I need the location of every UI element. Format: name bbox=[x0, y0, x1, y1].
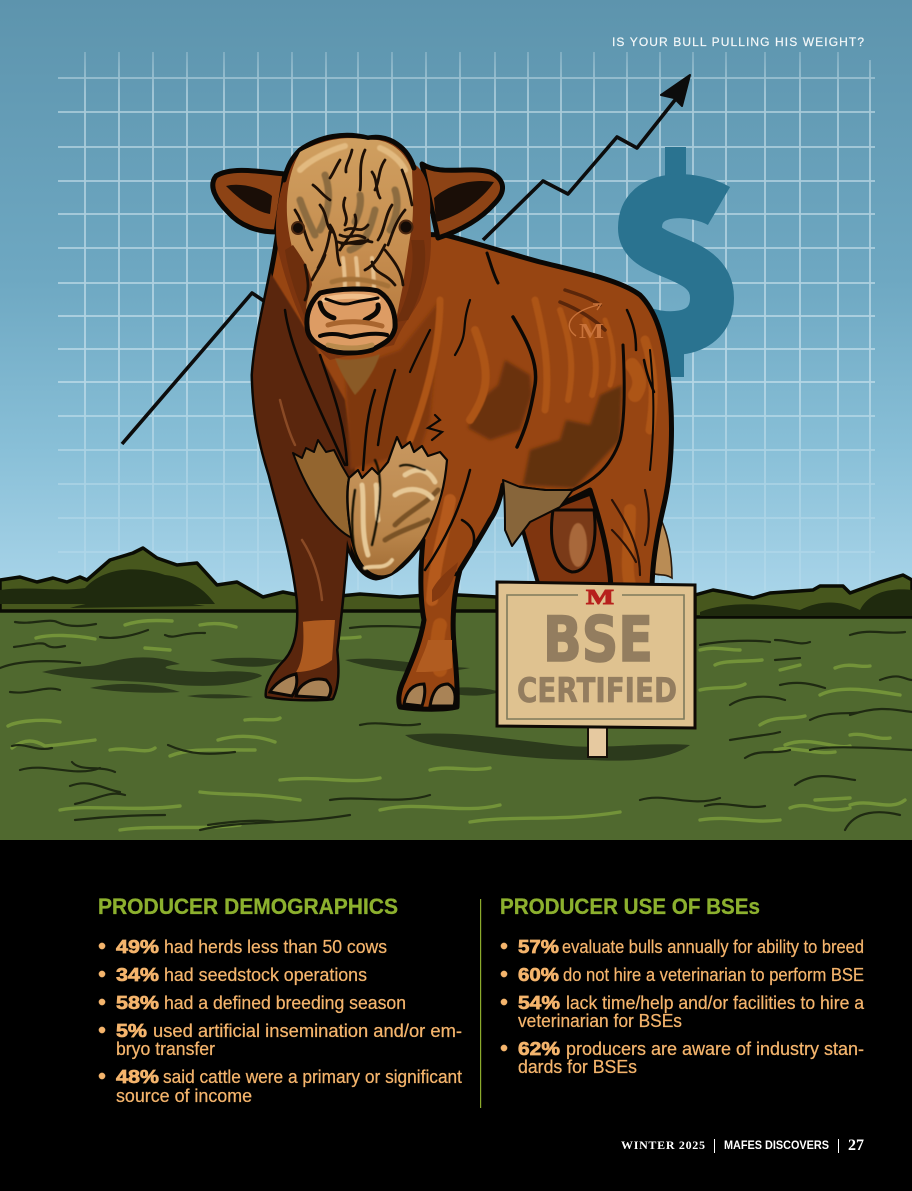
university M logo: M bbox=[586, 585, 614, 609]
heading: PRODUCER DEMOGRAPHICS bbox=[98, 894, 398, 919]
list item 62%: producers are aware of industry stan- bbox=[566, 1038, 864, 1059]
column: producer use of BSEs bbox=[500, 894, 865, 1077]
right ear bbox=[422, 164, 503, 238]
list item 62%: dards for BSEs bbox=[518, 1056, 637, 1077]
under-chin tone bbox=[335, 354, 380, 395]
list item 54%: 54% bbox=[518, 992, 560, 1013]
list item 60%: 60% bbox=[518, 964, 559, 985]
list item 54%: veterinarian for BSEs bbox=[518, 1010, 682, 1031]
left chest patch bbox=[293, 440, 352, 538]
list item 49%: had herds less than 50 cows bbox=[164, 936, 387, 957]
hooves bbox=[270, 674, 455, 706]
list item 54% bbox=[501, 992, 865, 1031]
grass highlights bbox=[8, 620, 905, 830]
body silhouette bbox=[253, 230, 671, 709]
face wrinkles bbox=[295, 150, 412, 300]
tail bbox=[650, 505, 672, 578]
right ear shade bbox=[434, 181, 494, 222]
tan leg highlights bbox=[280, 400, 458, 672]
column: producer demographics bbox=[98, 894, 462, 1106]
grass field bbox=[0, 606, 912, 840]
sign post bbox=[588, 726, 607, 757]
cream face bbox=[287, 138, 413, 322]
list item 48% bbox=[99, 1066, 462, 1106]
chest shading bbox=[352, 460, 438, 568]
face shading bbox=[300, 146, 405, 292]
flank brand: M bbox=[579, 319, 604, 343]
neck tone bbox=[345, 300, 440, 470]
list item 34%: had seedstock operations bbox=[164, 964, 367, 985]
chest patch bbox=[348, 437, 447, 576]
dark muscle lines bbox=[285, 253, 654, 575]
testes bbox=[552, 510, 595, 572]
cast shadows bbox=[42, 657, 690, 761]
list item 5%: bryo transfer bbox=[116, 1038, 215, 1059]
horizon trees bbox=[0, 548, 912, 617]
list item 57%: 57% bbox=[518, 936, 559, 957]
body shading bbox=[250, 240, 654, 705]
list item 57%: evaluate bulls annually for ability to breed bbox=[562, 936, 864, 957]
footer folio: WINTER 2025 bbox=[621, 1138, 705, 1152]
dark shoulder and leg bbox=[253, 272, 356, 699]
footer folio: MAFES DISCOVERS bbox=[724, 1138, 829, 1152]
left ear shade bbox=[226, 185, 272, 214]
footer folio: 27 bbox=[848, 1137, 864, 1154]
list item 58%: had a defined breeding season bbox=[164, 992, 406, 1013]
flank brand bbox=[569, 304, 604, 343]
list item 60%: do not hire a veterinarian to perform BSE bbox=[563, 964, 864, 985]
rising line chart arrow bbox=[122, 75, 690, 444]
sign board bbox=[497, 582, 695, 728]
list item 54%: lack time/help and/or facilities to hire a bbox=[566, 992, 865, 1013]
head crown outline bbox=[284, 135, 414, 180]
list item 48%: source of income bbox=[116, 1085, 252, 1106]
belly patch bbox=[503, 480, 573, 546]
list item 5% bbox=[99, 1020, 462, 1059]
list item 62% bbox=[501, 1038, 864, 1077]
BSE certified sign bbox=[497, 582, 695, 757]
nostrils and mouth bbox=[320, 296, 387, 348]
barrel dark streaks bbox=[523, 385, 622, 488]
cheek shade bbox=[285, 240, 425, 322]
dollar sign icon bbox=[635, 147, 719, 377]
list item 48%: said cattle were a primary or significant bbox=[163, 1066, 462, 1087]
left ear bbox=[213, 170, 285, 232]
eyes bbox=[292, 220, 412, 234]
column divider bbox=[480, 899, 481, 1108]
illustration scene bbox=[0, 0, 912, 840]
muzzle bbox=[307, 289, 395, 353]
list item 48%: 48% bbox=[116, 1066, 159, 1087]
list item 62%: 62% bbox=[518, 1038, 560, 1059]
heading: PRODUCER USE OF BSEs bbox=[500, 894, 760, 919]
list item 58%: 58% bbox=[116, 992, 159, 1013]
head base bbox=[276, 135, 431, 360]
sign inner border bbox=[507, 595, 684, 719]
footer folio bbox=[621, 1137, 864, 1154]
bull bbox=[213, 135, 672, 709]
list item 5%: 5% bbox=[116, 1020, 147, 1041]
far hind leg bbox=[520, 490, 615, 590]
BSE label: BSE bbox=[543, 603, 653, 676]
list item 34%: 34% bbox=[116, 964, 159, 985]
grass dark marks bbox=[0, 621, 912, 830]
list item 49%: 49% bbox=[116, 936, 159, 957]
orange stripes bbox=[410, 300, 653, 670]
sky background bbox=[0, 0, 912, 620]
list item 5%: used artificial insemination and/or em- bbox=[153, 1020, 462, 1041]
page header label: IS YOUR BULL PULLING HIS WEIGHT? bbox=[612, 35, 864, 49]
CERTIFIED label: CERTIFIED bbox=[517, 671, 677, 711]
chart grid bbox=[58, 52, 875, 590]
black info panel bbox=[0, 840, 912, 1191]
